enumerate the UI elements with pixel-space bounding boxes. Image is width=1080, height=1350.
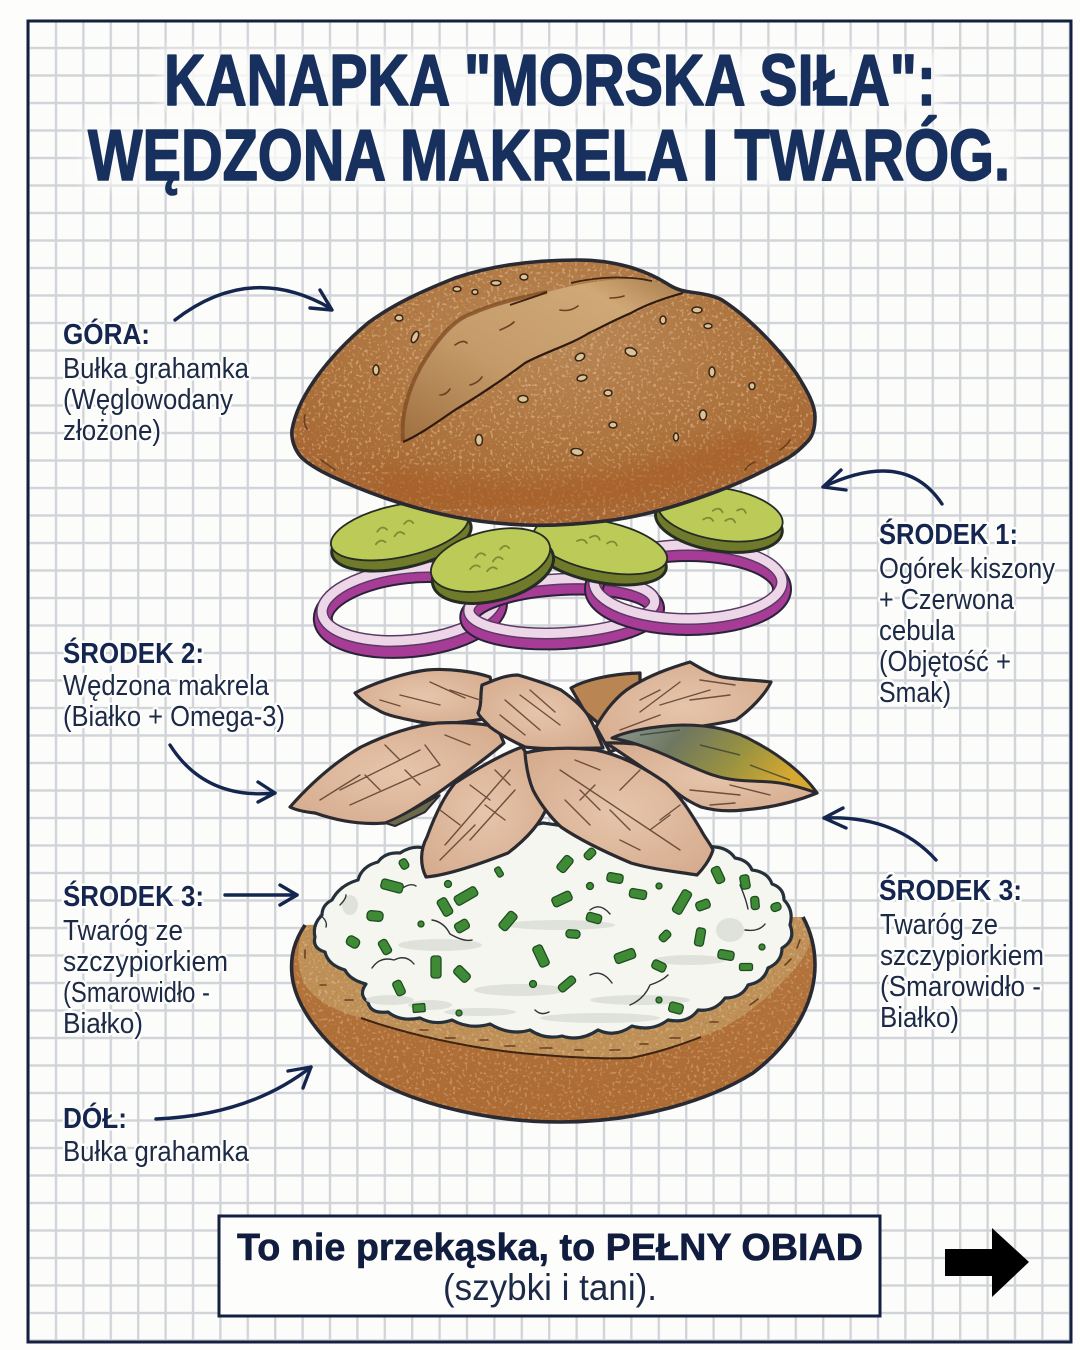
bottom summary box: (szybki i tani).: [443, 1267, 657, 1308]
callout: middle 2 label: ŚRODEK 2:: [63, 636, 204, 670]
callout: middle 1 label: Ogórek kiszony: [879, 553, 1055, 585]
callout: middle 1 label: [879, 517, 1055, 709]
callout: middle 3 left label: (Smarowidło -: [63, 977, 210, 1009]
arrow: cheese left: [225, 885, 297, 905]
callout: middle 1 label: ŚRODEK 1:: [879, 517, 1018, 551]
callout: middle 3 right label: [879, 873, 1044, 1034]
callout: bottom bun label: [63, 1101, 250, 1168]
flake back right: [571, 673, 640, 727]
illustration: top bun: [285, 255, 820, 530]
callout: middle 3 right label: szczypiorkiem: [880, 940, 1044, 972]
fish fibres: [320, 680, 770, 860]
illustration: smoked mackerel flakes: [290, 662, 817, 877]
bottom summary box: To nie przekąska, to PEŁNY OBIAD: [237, 1227, 863, 1269]
callout: middle 3 left label: Twaróg ze: [63, 915, 183, 947]
callout: middle 1 label: cebula: [879, 615, 956, 647]
arrow: mackerel: [170, 745, 275, 802]
arrow: next page: [945, 1228, 1029, 1297]
cheese shading: [342, 895, 744, 1023]
flake left: [290, 723, 504, 823]
arrow: bottom bun: [156, 1067, 311, 1119]
illustration: red onion rings: [318, 545, 782, 657]
illustration: cottage cheese with chives: [314, 823, 792, 1038]
callout: middle 2 label: Wędzona makrela: [63, 670, 270, 702]
callout: middle 2 label: (Białko + Omega-3): [63, 701, 285, 733]
flake centre right: [525, 748, 713, 875]
illustration: pickle slices: [325, 478, 788, 615]
callout: middle 1 label: Smak): [879, 677, 951, 709]
arrow: top bun: [175, 288, 332, 320]
mackerel skin flake: [612, 725, 817, 793]
flake back left: [355, 669, 494, 724]
flake centre top: [478, 675, 603, 749]
callout: middle 1 label: + Czerwona: [879, 584, 1015, 616]
callout: top bun label: [63, 317, 250, 447]
chives: [345, 847, 782, 1016]
callout: top bun label: GÓRA:: [63, 317, 150, 351]
callout: middle 2 label: [63, 636, 285, 733]
callout: middle 3 left label: Białko): [63, 1008, 143, 1040]
callout: bottom bun label: DÓŁ:: [63, 1101, 127, 1135]
callout: top bun label: złożone): [63, 415, 161, 447]
flake bottom left: [422, 747, 547, 877]
illustration: bottom bun: [285, 915, 820, 1125]
callout: top bun label: (Węglowodany: [63, 384, 233, 416]
bun seeds: [373, 274, 755, 456]
callout: middle 3 right label: Twaróg ze: [880, 909, 998, 941]
callout: top bun label: Bułka grahamka: [63, 353, 250, 385]
callout: bottom bun label: Bułka grahamka: [63, 1136, 250, 1168]
title: [85, 41, 1015, 196]
callout: middle 3 right label: ŚRODEK 3:: [879, 873, 1022, 907]
arrow: pickles and onion: [823, 470, 942, 504]
callout: middle 3 left label: ŚRODEK 3:: [63, 879, 204, 913]
callout: middle 1 label: (Objętość +: [879, 646, 1011, 678]
arrow: cheese right: [824, 808, 936, 860]
flake right under skin: [606, 743, 817, 811]
callout: middle 3 right label: (Smarowidło -: [880, 971, 1041, 1003]
bottom summary box: [219, 1216, 880, 1316]
callout: middle 3 left label: [63, 879, 228, 1040]
callout: middle 3 right label: Białko): [880, 1002, 959, 1034]
callout: middle 3 left label: szczypiorkiem: [63, 946, 228, 978]
flake top right: [596, 662, 771, 752]
